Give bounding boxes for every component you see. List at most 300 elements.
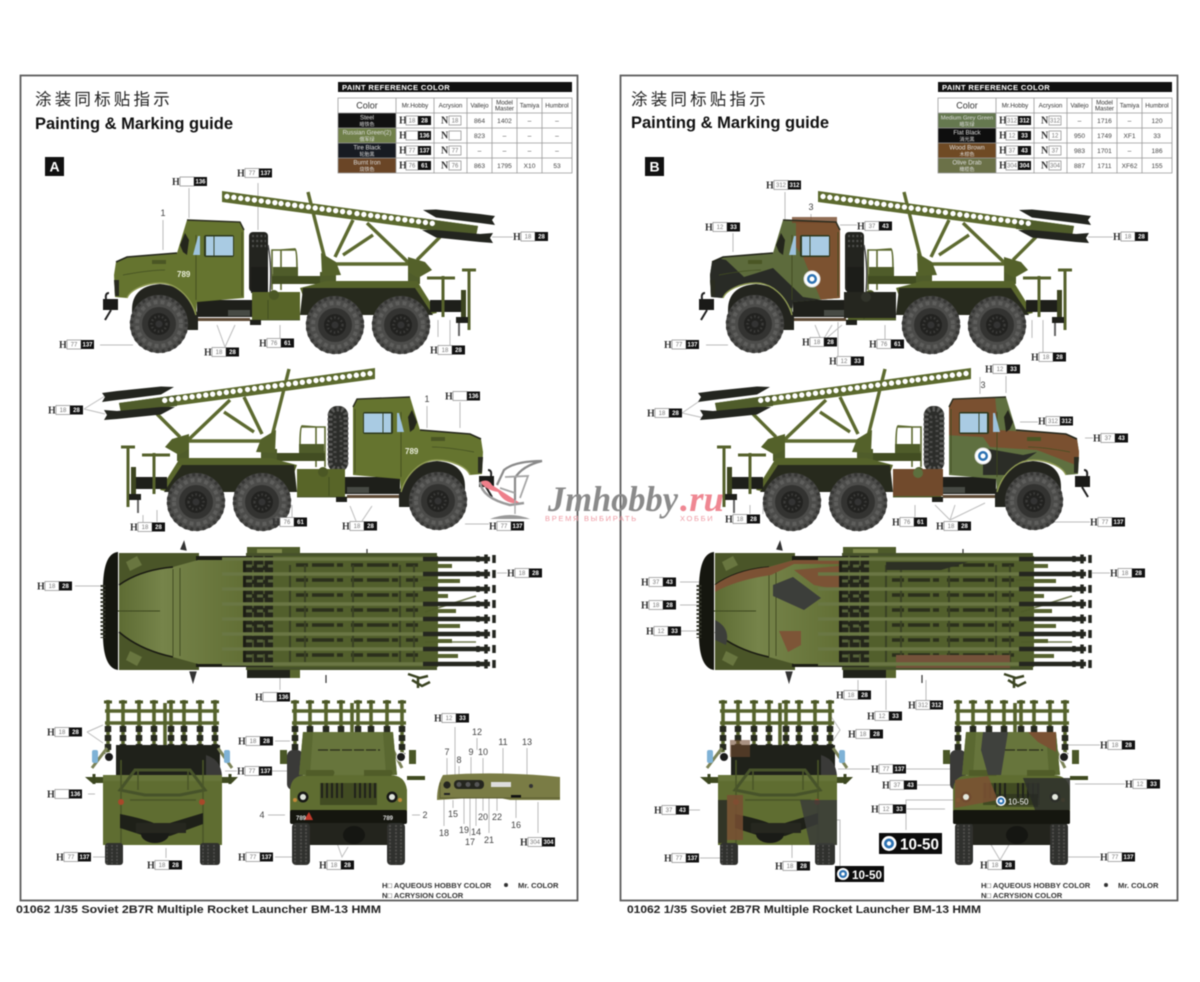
- callout: B2 77/137: 77: [1102, 520, 1109, 526]
- callout: A2 136: H: [445, 392, 453, 402]
- table: paint reference color A: [338, 82, 572, 173]
- callout: A rear 18/28: [47, 728, 82, 738]
- callout: B top 312/312: 312: [918, 703, 929, 709]
- table: paint reference color A: Model: [496, 100, 513, 106]
- footer caption A: 01062 1/35 Soviet 2B7R Multiple Rocket Launcher BM-13 HMM: [16, 904, 381, 916]
- table: paint reference color B: 橄榄色: [959, 166, 975, 173]
- table: paint reference color B: Humbrol: [1145, 102, 1169, 110]
- table: paint reference color A: 77: [452, 148, 459, 154]
- table: paint reference color B: 304: [1007, 164, 1018, 170]
- table: paint reference color B: Medium Grey Green: [941, 116, 993, 122]
- marking on truck B front: 10-50: [1008, 798, 1029, 806]
- table: paint reference color B: 887: [1074, 163, 1085, 170]
- callout: A2 18/28 step: 18: [354, 524, 361, 530]
- table: paint reference color A: 18: [409, 118, 416, 124]
- table: paint reference color A: –: [528, 133, 532, 140]
- callout: A1 18/28 rockets: [513, 232, 548, 243]
- callout: A1 18/28 rear: 18: [442, 348, 449, 354]
- table: paint reference color B: –: [1078, 118, 1082, 125]
- table: paint reference color B: 1701: [1097, 148, 1112, 155]
- table: paint reference color A: 77: [409, 148, 416, 154]
- callout: B front 18/28 axle: H: [980, 860, 988, 872]
- table: paint reference color B: 186: [1151, 148, 1163, 155]
- callout: B1 312/312: H: [766, 180, 774, 192]
- table: paint reference color A: Mr.Hobby: [402, 102, 429, 110]
- callout: A1 18/28 step: [204, 348, 239, 358]
- callout: B1 12/33 tank: [829, 356, 864, 368]
- leader lines: scheme B: [680, 192, 1125, 866]
- table: paint reference color A: Vallejo: [470, 102, 489, 110]
- legend B: N□ ACRYSION COLOR: [981, 891, 1063, 900]
- callout: A2 18/28 rockets: 28: [73, 408, 80, 414]
- table: paint reference color B: 312: [1007, 118, 1018, 124]
- truck A side view, passenger side: 789: [405, 447, 419, 456]
- table: paint reference color A: Russian Green(2): [343, 130, 391, 136]
- legend A: [382, 881, 559, 900]
- callout: B1 76/61: 76: [881, 342, 888, 348]
- callout: B2 37/43: H: [1093, 434, 1101, 444]
- callout: B top 312/312: H: [908, 700, 916, 712]
- callout: B rear 77/137: [664, 854, 699, 864]
- truck A front view: [280, 700, 425, 865]
- table: paint reference color B: Acrysion: [1039, 102, 1063, 110]
- heading: Chinese title B: 涂装同标贴指示: [631, 86, 769, 110]
- table: paint reference color B: [938, 82, 1172, 173]
- callout: A1 77/137: 137: [260, 171, 271, 177]
- callout: B front 18/28 axle: 18: [992, 863, 999, 869]
- callout: A top 136: 136: [278, 695, 289, 701]
- callout: A rear 18/28 axle: H: [147, 860, 155, 872]
- callout: B1 18/28 step: 28: [827, 340, 834, 346]
- callout: B top 37/43: 37: [653, 580, 660, 586]
- callout: A front 18/28 axle: 28: [344, 863, 351, 869]
- callout: B2 18/28 step: 28: [961, 524, 968, 530]
- legend B: [981, 881, 1159, 900]
- table: paint reference color B: –: [1128, 148, 1132, 155]
- heading: Painting and Marking guide B: Painting & Marking guide: [631, 114, 829, 132]
- part number labels A: 11: [498, 737, 508, 747]
- legend A: H□ AQUEOUS HOBBY COLOR: [382, 881, 492, 890]
- callout: B front 18/28: 28: [1125, 743, 1132, 749]
- legend B: Mr. COLOR: [1118, 881, 1159, 890]
- watermark wordmark: [545, 479, 724, 523]
- table: paint reference color A: Humbrol: [545, 102, 569, 110]
- callout: B front 18/28: H: [1100, 740, 1108, 752]
- table: paint reference color A: H: [399, 116, 407, 126]
- callout: A front 77/137 spare: [237, 766, 272, 778]
- table: paint reference color B: N: [1041, 130, 1049, 142]
- table: paint reference color A: 863: [474, 163, 485, 170]
- callout: dashboard 304/304: H: [520, 838, 528, 848]
- callout: A front 18/28: H: [238, 736, 246, 748]
- table: paint reference color B: 12: [1009, 134, 1016, 140]
- watermark wordmark: ВРЕМЯ ВЫБИРАТЬ: [545, 514, 638, 523]
- table: paint reference color A: –: [528, 148, 532, 155]
- callout: B1 312/312: 312: [776, 183, 787, 189]
- callout: A2 136: [445, 392, 480, 402]
- callout: B1 12/33: 12: [717, 225, 724, 231]
- callout: B1 37/43: 43: [882, 224, 889, 230]
- callout: B1 76/61: [869, 340, 904, 350]
- callout: B centre 37/43: 43: [907, 783, 914, 789]
- callout: B top 12/33: [646, 626, 681, 638]
- table: paint reference color B: 120: [1151, 118, 1163, 125]
- decal: 10-50 large: 10-50: [900, 836, 939, 854]
- callout: A2 18/28 step: [342, 522, 377, 532]
- callout: B1 18/28 rockets: [1113, 232, 1148, 243]
- table: paint reference color B: 43: [1021, 148, 1028, 154]
- callout: A1 18/28 step: 28: [229, 350, 236, 356]
- callout: A top 18/28 bumper: H: [37, 582, 45, 592]
- callout: B top 18/28 rockets: [1110, 568, 1145, 580]
- callout: B2 18/28 rockets: [647, 408, 682, 420]
- watermark wordmark: ХОББИ: [680, 514, 714, 523]
- table: paint reference color A: X10: [524, 163, 536, 170]
- callout: B2 18/28 rear: [725, 514, 760, 526]
- callout: A2 76/61: 61: [297, 520, 304, 526]
- dashboard detail: [437, 773, 560, 800]
- table: paint reference color B: H: [999, 130, 1007, 142]
- callout: A rear 77/137: 77: [68, 855, 75, 861]
- callout: A top 18/28 rockets: 18: [519, 571, 526, 577]
- legend A: Mr. COLOR: [518, 881, 559, 890]
- part number labels A: 19: [459, 825, 469, 835]
- footer caption B: 01062 1/35 Soviet 2B7R Multiple Rocket Launcher BM-13 HMM: [627, 904, 981, 916]
- callout: A1 76/61: H: [259, 338, 267, 350]
- callout: A2 18/28 rear: 18: [142, 525, 149, 531]
- table: paint reference color A: 136: [419, 134, 430, 140]
- callout: B rear 18/28: H: [848, 730, 856, 740]
- callout: A2 77/137: H: [489, 522, 497, 532]
- table: paint reference color A: 76: [409, 164, 416, 170]
- table: paint reference color B: 304: [1019, 164, 1030, 170]
- callout: B top 18/28 tank: 18: [848, 693, 855, 699]
- table: paint reference color A: H: [399, 130, 407, 142]
- table: paint reference color B: 37: [1009, 148, 1016, 154]
- table: paint reference color B: Flat Black: [953, 130, 981, 136]
- truck B side view, passenger side: [698, 368, 1090, 531]
- callout: B centre 12/33: H: [871, 804, 879, 816]
- callout: B top 18/28: 18: [653, 603, 660, 609]
- callout: A1 76/61: 61: [284, 341, 291, 347]
- callout: B front 12/33: 12: [1137, 782, 1144, 788]
- callout: A rear 18/28: 18: [59, 730, 66, 736]
- part number labels A: [160, 208, 532, 847]
- callout: B rear 77/137: H: [664, 854, 672, 864]
- table: paint reference color B: Tamiya: [1120, 102, 1140, 110]
- callout: B2 18/28 step: H: [936, 522, 944, 532]
- table: paint reference color A: Steel: [360, 114, 374, 122]
- callout: A top 18/28 rockets: [507, 568, 542, 580]
- callout: B top 37/43: 43: [666, 580, 673, 586]
- truck A rear view: [85, 700, 238, 865]
- panel: guide B frame: [620, 76, 1178, 900]
- callout: A1 77/137 tyre: 137: [82, 343, 93, 349]
- callout: B top 18/28 rockets: H: [1110, 568, 1118, 580]
- table: paint reference color B: 12: [1052, 134, 1059, 140]
- table: paint reference color B: H: [999, 160, 1007, 172]
- part number labels A: 2: [422, 810, 428, 820]
- table: paint reference color A: N: [441, 160, 449, 172]
- badge: scheme B: B: [649, 158, 660, 174]
- table: paint reference color B: Model: [1096, 100, 1113, 106]
- part number labels A: 12: [472, 727, 482, 737]
- callout: B rear 18/28 axle: H: [775, 862, 783, 872]
- part number labels A: 13: [522, 737, 532, 747]
- table: paint reference color A: Tire Black: [353, 144, 382, 152]
- callout: B top 12/33: 33: [671, 629, 678, 635]
- part number labels A: 21: [484, 835, 494, 845]
- callout: B1 18/28 rear: H: [1031, 352, 1039, 364]
- part number labels A: 16: [511, 820, 521, 830]
- callout: B rear 37/43: 37: [666, 808, 673, 814]
- callout: B front 77/137: 137: [1123, 855, 1134, 861]
- badge: scheme B: [645, 157, 664, 176]
- table: paint reference color B: N: [1041, 160, 1049, 172]
- callout: B rear 18/28 axle: [775, 862, 810, 872]
- callout: A1 18/28 rockets: H: [513, 232, 521, 243]
- table: paint reference color B: XF62: [1122, 163, 1138, 170]
- table: paint reference color B: H: [999, 116, 1007, 126]
- table: paint reference color A: Master: [495, 106, 514, 112]
- callout: B1 18/28 rockets: H: [1113, 232, 1121, 243]
- callout: B top 18/28: 28: [666, 603, 673, 609]
- callout: B centre 12/33: 12: [883, 807, 890, 813]
- callout: B rear 77/137: 77: [676, 856, 683, 862]
- callout: B2 12/33: 12: [997, 367, 1004, 373]
- table: paint reference color A: 1402: [497, 118, 512, 125]
- decal: 10-50 large: [879, 833, 942, 854]
- truck B side view, driver's side: [699, 191, 1091, 354]
- callout: B1 77/137: 77: [676, 343, 683, 349]
- part number labels A: 9: [468, 747, 474, 757]
- truck B top view: [699, 542, 1090, 688]
- callout: A2 76/61: [272, 518, 307, 528]
- part number labels B: [808, 202, 986, 390]
- callout: B centre 37/43: 37: [894, 783, 901, 789]
- callout: B top 312/312: 312: [931, 703, 942, 709]
- table: paint reference color B: 312: [1050, 118, 1061, 124]
- callout: A top 18/28 bumper: [37, 582, 72, 592]
- part number labels A: 18: [439, 828, 449, 838]
- callout: A2 18/28 rear: H: [130, 522, 138, 534]
- truck A front view: 789: [296, 816, 307, 822]
- callout: A2 77/137: 137: [512, 524, 523, 530]
- table: paint reference color A: Tamiya: [520, 102, 540, 110]
- callout: B2 18/28 rear: 28: [750, 517, 757, 523]
- callout: B1 12/33: [705, 222, 740, 234]
- callout: A1 18/28 rear: [430, 346, 465, 356]
- callout: B1 18/28 step: 18: [814, 340, 821, 346]
- part number labels A: 10: [478, 747, 488, 757]
- callout: B1 37/43: H: [857, 222, 865, 232]
- callout: B rear 18/28: 28: [873, 732, 880, 738]
- callout: B2 18/28 rockets: 18: [659, 411, 666, 417]
- callout: B2 18/28 rockets: 28: [672, 411, 679, 417]
- table: paint reference color B: 312: [1019, 118, 1030, 124]
- callout: B1 77/137: 137: [687, 343, 698, 349]
- callout: A rear 77/137: 137: [79, 855, 90, 861]
- callout: B2 76/61: 76: [904, 520, 911, 526]
- table: paint reference color A: Acrysion: [439, 102, 463, 110]
- table: paint reference color B: Color: [956, 100, 978, 110]
- callout: A rear 136: H: [47, 790, 55, 800]
- callout: B1 12/33 tank: 33: [854, 359, 861, 365]
- table: paint reference color B: 155: [1151, 163, 1163, 170]
- callout: B top 18/28 rockets: 18: [1122, 571, 1129, 577]
- panel: guide A frame: [20, 76, 578, 900]
- callout: B rear 37/43: [654, 806, 689, 816]
- part number labels B: 3: [980, 380, 986, 390]
- callout: A top 18/28 rockets: 28: [532, 571, 539, 577]
- callout: B2 37/43: 43: [1118, 436, 1125, 442]
- callout: A2 136: 136: [468, 394, 479, 400]
- table: paint reference color B: Wood Brown: [949, 144, 985, 152]
- callout: B top 18/28 tank: H: [836, 690, 844, 702]
- callout: B1 312/312: 312: [789, 183, 800, 189]
- callout: A rear 77/137: H: [56, 852, 64, 864]
- truck A side view, passenger side: [102, 368, 494, 531]
- callout: A front 18/28: [238, 736, 273, 748]
- truck B front view: [943, 700, 1088, 865]
- table: paint reference color B: N: [1041, 116, 1049, 126]
- callout: B top 312/312: [908, 700, 943, 712]
- callout: A front 77/137 tyre: [238, 852, 273, 864]
- callout: A rear 18/28: 28: [72, 730, 79, 736]
- callout: A1 77/137 tyre: 77: [71, 343, 78, 349]
- table: paint reference color B: Mr.Hobby: [1002, 102, 1029, 110]
- callout: A front 18/28: 18: [250, 739, 257, 745]
- part number labels A: 20: [478, 812, 488, 822]
- callout: B rear 37/43: H: [654, 806, 662, 816]
- table: paint reference color B: Master: [1095, 106, 1114, 112]
- part number labels A: 14: [471, 827, 481, 837]
- callout: B2 37/43: [1093, 434, 1128, 444]
- callout: B2 312/312: 312: [1061, 419, 1072, 425]
- table: paint reference color B: 暗灰绿: [959, 121, 975, 128]
- callout: B centre 77/137: 137: [894, 767, 905, 773]
- callout: B1 18/28 rear: [1031, 352, 1066, 364]
- table: paint reference color B: 304: [1050, 164, 1061, 170]
- callout: B1 76/61: 61: [894, 342, 901, 348]
- callout: B top 12/33: H: [646, 626, 654, 638]
- table: paint reference color A: Color: [356, 100, 378, 110]
- callout: B front 18/28: 18: [1112, 743, 1119, 749]
- table: paint reference color A: N: [441, 116, 449, 126]
- table: paint reference color A: 61: [421, 164, 428, 170]
- callout: B2 76/61: 61: [917, 520, 924, 526]
- table: paint reference color A: H: [399, 160, 407, 172]
- callout: A1 77/137: [237, 168, 272, 180]
- table: paint reference color B: 983: [1074, 148, 1085, 155]
- callout: B top 18/28: [641, 600, 676, 612]
- callout: B centre 12/33: [871, 804, 906, 816]
- callout: B2 312/312: [1038, 416, 1073, 428]
- callout: dashboard 12/33: 12: [446, 716, 453, 722]
- callout: B top 12/33 tank: 12: [879, 714, 886, 720]
- callout: B rear 18/28: [848, 730, 883, 740]
- callout: A1 18/28 rockets: 18: [525, 235, 532, 241]
- part number labels A: 1: [424, 394, 430, 404]
- callout: B centre 77/137: [871, 764, 906, 776]
- table: paint reference color B: 950: [1074, 133, 1085, 140]
- callout: B1 37/43: 37: [869, 224, 876, 230]
- callout: A top 18/28 bumper: 18: [49, 584, 56, 590]
- decal: 10-50 small: [835, 866, 884, 882]
- callout: B1 77/137: [664, 340, 699, 351]
- callout: B rear 18/28: 18: [860, 732, 867, 738]
- table: paint reference color B: 1711: [1097, 163, 1112, 170]
- callout: A front 18/28: 28: [263, 739, 270, 745]
- callout: A1 77/137: H: [237, 168, 245, 180]
- watermark logo: ship sail: [480, 461, 542, 519]
- callout: A1 76/61: 76: [271, 341, 278, 347]
- callout: B2 18/28 rockets: H: [647, 408, 655, 420]
- truck B rear view: [700, 700, 853, 865]
- part number labels A: 17: [465, 837, 475, 847]
- callout: A top 18/28 bumper: 28: [62, 584, 69, 590]
- callout: B1 18/28 step: H: [802, 338, 810, 348]
- callout: A1 18/28 step: 18: [216, 350, 223, 356]
- watermark wordmark: .ru: [680, 479, 724, 519]
- callout: B1 12/33: H: [705, 222, 713, 234]
- callout: A rear 18/28 axle: 18: [159, 863, 166, 869]
- callout: B2 18/28 step: [936, 522, 971, 532]
- callout: B2 18/28 rear: 18: [737, 517, 744, 523]
- callout: A1 18/28 rear: H: [430, 346, 438, 356]
- table: paint reference color A: 864: [474, 118, 485, 125]
- callout: B2 12/33: 33: [1010, 367, 1017, 373]
- callout: B centre 12/33: 33: [896, 807, 903, 813]
- callout: B2 18/28 step: 18: [948, 524, 955, 530]
- table: paint reference color A: 烧铁色: [359, 166, 375, 173]
- callout: B top 12/33 tank: H: [867, 712, 875, 722]
- callout: A2 18/28 rockets: H: [48, 406, 56, 416]
- callout: A rear 136: 136: [70, 792, 81, 798]
- callout: A1 77/137: 77: [249, 171, 256, 177]
- callout: B top 18/28 tank: 28: [861, 693, 868, 699]
- callout: B rear 18/28 axle: 28: [800, 864, 807, 870]
- callout: A front 18/28 axle: H: [319, 860, 327, 872]
- callout: A rear 77/137: [56, 852, 91, 864]
- callout: A1 136: 136: [195, 180, 206, 186]
- callout: A1 18/28 rockets: 28: [538, 235, 545, 241]
- callout: B centre 77/137: H: [871, 764, 879, 776]
- callout: B1 12/33 tank: 12: [841, 359, 848, 365]
- callout: B2 77/137: H: [1090, 518, 1098, 528]
- callout: dashboard 304/304: 304: [543, 840, 554, 846]
- callout: A top 136: H: [255, 692, 263, 704]
- callout: dashboard 12/33: H: [434, 714, 442, 724]
- callout: B1 12/33: 33: [730, 225, 737, 231]
- part number labels A: 15: [448, 809, 458, 819]
- heading: Chinese title A: 涂装同标贴指示: [35, 86, 173, 110]
- table: paint reference color A: H: [399, 146, 407, 156]
- badge: scheme A: A: [49, 158, 60, 174]
- callout: B2 77/137: 137: [1113, 520, 1124, 526]
- table: paint reference color B: 木棕色: [959, 151, 975, 158]
- callout: B2 12/33: H: [985, 364, 993, 376]
- callout: A front 77/137 tyre: H: [238, 852, 246, 864]
- callout: dashboard 12/33: 33: [459, 716, 466, 722]
- table: paint reference color A: 轮胎黑: [359, 151, 375, 158]
- callout: A2 18/28 rear: 28: [155, 525, 162, 531]
- part number labels B: 3: [808, 202, 814, 212]
- callout: B top 12/33 tank: 33: [892, 714, 899, 720]
- table: paint reference color A: 俄军绿: [359, 136, 375, 143]
- callout: B front 12/33: [1125, 780, 1160, 790]
- callout: B front 18/28 axle: 28: [1005, 863, 1012, 869]
